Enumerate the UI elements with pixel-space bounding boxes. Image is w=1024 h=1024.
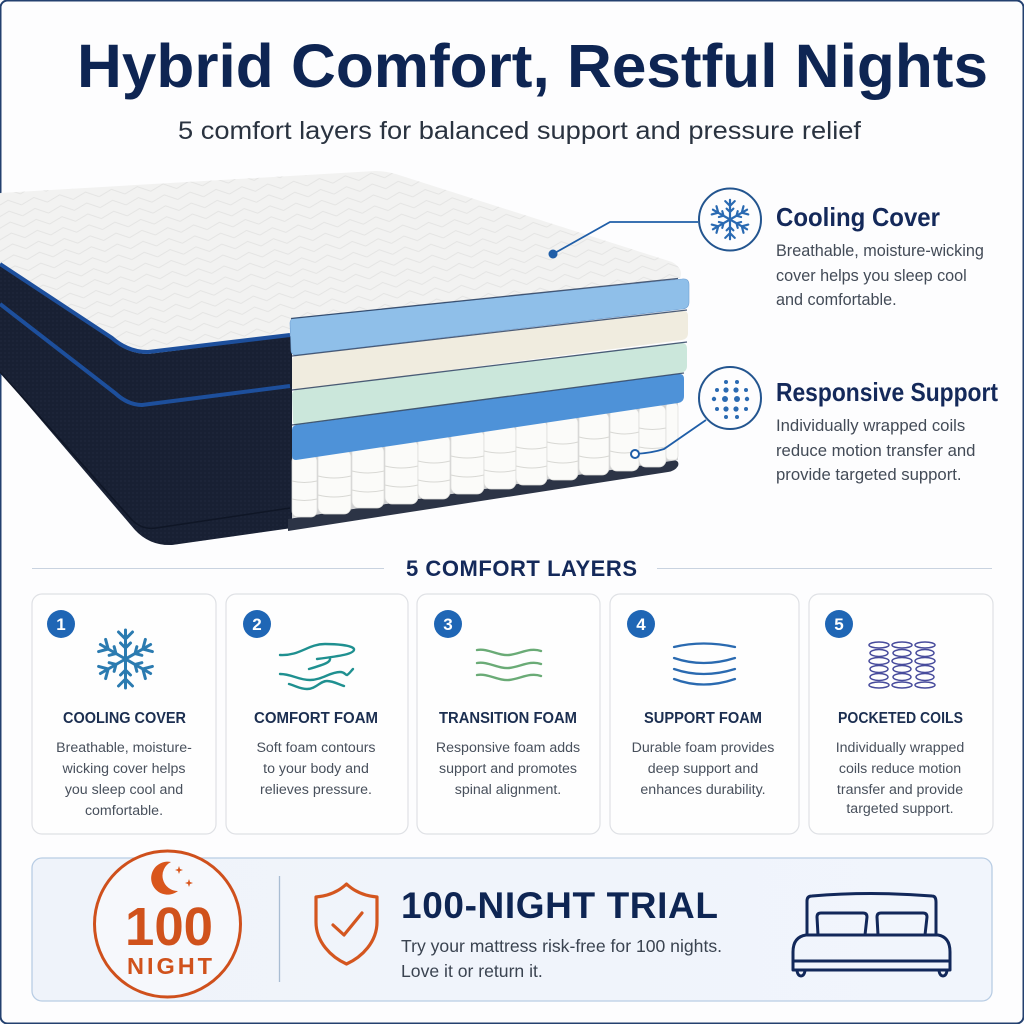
badge 3 — [434, 610, 462, 638]
icon: snowflake in circle — [699, 188, 761, 250]
card title: COMFORT FOAM — [254, 710, 378, 727]
card text: coils reduce motion — [839, 761, 961, 777]
layer: cream foam — [292, 311, 688, 390]
title: Hybrid Comfort, Restful Nights — [77, 32, 988, 100]
banner heading: 100-NIGHT TRIAL — [401, 885, 718, 926]
card title: POCKETED COILS — [838, 710, 963, 727]
icon: support dots in circle — [699, 367, 761, 429]
description: Breathable, moisture-wicking — [776, 242, 984, 260]
heading: Responsive Support — [776, 377, 998, 407]
card title: TRANSITION FOAM — [439, 710, 577, 727]
pocketed coils — [292, 402, 678, 518]
layer shadows — [291, 278, 687, 425]
description: and comfortable. — [776, 291, 897, 309]
layer: top blue foam — [290, 279, 689, 355]
callout: responsive support — [631, 367, 998, 484]
card title: SUPPORT FOAM — [644, 710, 762, 727]
card text: Soft foam contours — [256, 740, 376, 756]
badge 2: 2 — [252, 615, 262, 634]
badge 1: 1 — [56, 615, 66, 634]
unit: NIGHT — [127, 953, 213, 979]
card title: COOLING COVER — [63, 710, 186, 727]
layer: green foam — [292, 343, 687, 425]
badge 4 — [627, 610, 655, 638]
top piping — [0, 264, 290, 352]
badge 2 — [243, 610, 271, 638]
card text: comfortable. — [85, 803, 163, 819]
description: provide targeted support. — [776, 465, 962, 484]
card text: you sleep cool and — [65, 782, 183, 798]
icon: waves — [477, 650, 541, 680]
mattress cutaway illustration — [0, 171, 689, 545]
description: reduce motion transfer and — [776, 441, 975, 460]
card text: enhances durability. — [640, 782, 766, 798]
panel: cooling cover — [32, 594, 216, 834]
banner text: Try your mattress risk-free for 100 nights. — [401, 936, 722, 956]
panel: trial banner — [32, 851, 992, 1001]
callout: cooling cover — [548, 188, 984, 309]
number: 100 — [125, 897, 213, 957]
description: Individually wrapped coils — [776, 416, 965, 435]
panel: transition foam — [417, 594, 600, 834]
leader line — [553, 222, 698, 254]
icon: bed — [793, 894, 950, 976]
icon: hand on foam — [280, 644, 354, 689]
badge 3: 3 — [443, 615, 453, 634]
leader dot — [631, 450, 639, 458]
layer: blue support foam — [292, 374, 684, 460]
badge 1 — [47, 610, 75, 638]
heading: Cooling Cover — [776, 202, 940, 232]
card text: wicking cover helps — [61, 761, 186, 777]
card text: Individually wrapped — [836, 740, 964, 756]
coil base — [288, 460, 678, 531]
subtitle: 5 comfort layers for balanced support and pressure relief — [178, 117, 861, 145]
badge 4: 4 — [636, 615, 646, 634]
card text: spinal alignment. — [455, 782, 561, 798]
leader dot — [548, 250, 558, 258]
middle piping — [0, 304, 290, 405]
mattress side panel — [0, 265, 292, 545]
badge: 100 night — [94, 851, 240, 997]
card text: to your body and — [263, 761, 369, 777]
section heading: 5 COMFORT LAYERS — [406, 556, 637, 581]
panel: comfort foam — [226, 594, 408, 834]
icon: snowflake — [97, 630, 154, 688]
panel: support foam — [610, 594, 799, 834]
description: cover helps you sleep cool — [776, 267, 967, 285]
mattress top cover — [0, 171, 681, 350]
card text: targeted support. — [846, 801, 954, 817]
card text: deep support and — [648, 761, 758, 777]
card text: transfer and provide — [837, 782, 963, 798]
banner text: Love it or return it. — [401, 961, 543, 981]
badge 5: 5 — [834, 615, 844, 634]
card text: support and promotes — [439, 761, 577, 777]
card text: Breathable, moisture- — [56, 740, 192, 756]
badge 5 — [825, 610, 853, 638]
icon: foam stack — [674, 644, 735, 684]
card text: relieves pressure. — [260, 782, 372, 798]
icon: moon and stars — [151, 862, 193, 895]
leader line — [635, 420, 706, 454]
card text: Durable foam provides — [632, 740, 774, 756]
panel: pocketed coils — [809, 594, 993, 834]
card text: Responsive foam adds — [436, 740, 580, 756]
icon: coils — [869, 642, 935, 688]
icon: shield check — [316, 884, 377, 964]
